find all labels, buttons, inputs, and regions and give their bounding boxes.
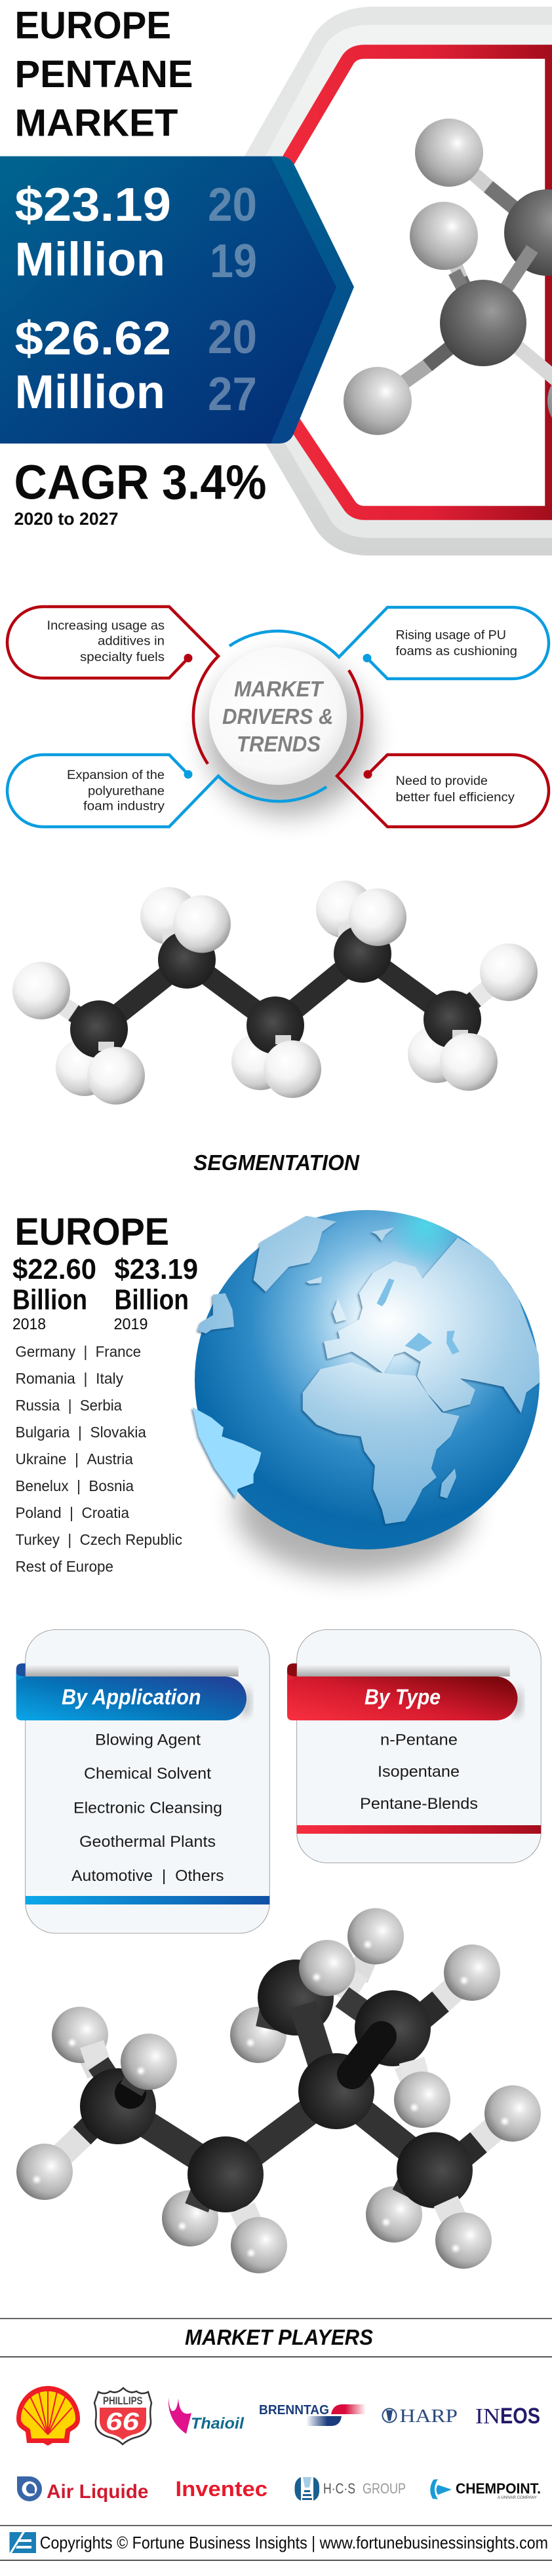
- CAGR: CAGR 3.4%: [14, 455, 266, 510]
- logo: Brenntag: [259, 2403, 366, 2426]
- application list: Automotive | Others: [71, 1867, 224, 1885]
- application list: [71, 1731, 224, 1885]
- callout: increasing usage: [7, 607, 218, 764]
- year 2027: 27: [208, 368, 257, 421]
- regional values: $22.60: [12, 1253, 96, 1285]
- callout: increasing usage: Increasing usage as: [47, 618, 165, 633]
- logo: Inventec: Inventec: [176, 2477, 267, 2501]
- country list: Turkey | Czech Republic: [16, 1531, 182, 1548]
- value: 2019: Million: [14, 233, 165, 286]
- callout: rising PU foams: foams as cushioning: [396, 644, 517, 658]
- accent bar: [26, 1896, 269, 1904]
- callout: polyurethane foam: polyurethane: [88, 784, 165, 798]
- logo: Thaioil: [168, 2398, 245, 2434]
- logo: Harp: HARP: [400, 2406, 458, 2427]
- callout: fuel efficiency: Need to provide: [396, 774, 488, 788]
- title: PENTANE: [14, 53, 193, 96]
- panel: market drivers and trends: [7, 607, 549, 827]
- CAGR: 2020 to 2027: [14, 509, 118, 529]
- panel: by application: [16, 1630, 269, 1933]
- logo: Chempoint: A UNIVAR COMPANY: [498, 2496, 537, 2500]
- molecule: top grey: [344, 119, 552, 435]
- callout: polyurethane foam: [7, 755, 326, 827]
- value: 2019: $23.19: [14, 179, 171, 231]
- callout: polyurethane foam: foam industry: [83, 799, 165, 814]
- logo: Fortune Business Insights: [9, 2532, 36, 2553]
- center heading: DRIVERS &: [222, 704, 333, 729]
- callout: polyurethane foam: Expansion of the: [67, 768, 165, 782]
- center heading: [222, 677, 333, 756]
- logo: Phillips 66: 66: [106, 2408, 140, 2436]
- logo: Phillips 66: [94, 2388, 151, 2444]
- country list: Russia | Serbia: [16, 1397, 123, 1414]
- country list: Rest of Europe: [16, 1558, 113, 1575]
- callout: rising PU foams: Rising usage of PU: [396, 628, 506, 642]
- inland seas: [377, 1279, 460, 1355]
- logo: Phillips 66: PHILLIPS: [103, 2395, 143, 2407]
- country list: Romania | Italy: [16, 1370, 123, 1387]
- logo: INEOS: EOS: [500, 2404, 540, 2429]
- application list: Blowing Agent: [95, 1731, 201, 1749]
- application list: Geothermal Plants: [79, 1833, 216, 1851]
- year 2019: 19: [210, 235, 257, 288]
- year 2027: 20: [208, 311, 257, 364]
- title: [14, 4, 193, 144]
- center circle: [209, 647, 347, 785]
- ribbon: by application: [16, 1663, 250, 1720]
- hero panel: hexagon frame with molecule: [245, 7, 552, 556]
- heading: market players: MARKET PLAYERS: [185, 2325, 373, 2349]
- callout: fuel efficiency: [337, 670, 549, 827]
- logo: Chempoint: CHEMPOINT.: [456, 2480, 541, 2497]
- logo: Air Liquide: [17, 2476, 148, 2503]
- ribbon: by application: By Application: [62, 1685, 201, 1709]
- country list: Benelux | Bosnia: [16, 1477, 134, 1494]
- regional values: 2019: [114, 1316, 148, 1333]
- value: 2027: $26.62: [14, 313, 171, 365]
- regional values: 2018: [12, 1316, 46, 1333]
- type list: Isopentane: [378, 1763, 460, 1781]
- logo: Harp: [383, 2406, 458, 2427]
- logo: HCS Group: [294, 2477, 406, 2501]
- center heading: MARKET: [234, 677, 325, 701]
- logo: HCS Group: GROUP: [363, 2480, 406, 2497]
- country list: Ukraine | Austria: [16, 1450, 134, 1468]
- logo: Air Liquide: Air Liquide: [47, 2481, 148, 2503]
- logo: INEOS: IN: [475, 2404, 500, 2429]
- value: 2027: [14, 313, 171, 419]
- regional values: [12, 1253, 198, 1333]
- callout: fuel efficiency: better fuel efficiency: [396, 790, 515, 805]
- heading: Europe: EUROPE: [14, 1211, 169, 1253]
- logo: INEOS: [475, 2404, 540, 2429]
- country list: Poland | Croatia: [16, 1504, 130, 1521]
- center heading: TRENDS: [237, 732, 321, 756]
- callout: rising PU foams: [229, 607, 549, 679]
- logo: Shell: [16, 2386, 80, 2446]
- logo: Chempoint: [430, 2479, 541, 2500]
- value: 2027: Million: [14, 366, 165, 419]
- continents: [193, 1216, 540, 1524]
- footer: [0, 2526, 552, 2560]
- type list: Pentane-Blends: [360, 1795, 478, 1813]
- molecule: pentane chain: [12, 881, 538, 1105]
- logo: HCS Group: H·C·S: [323, 2480, 355, 2497]
- application list: Chemical Solvent: [84, 1765, 211, 1783]
- logo: Thaioil: Thaioil: [191, 2415, 245, 2433]
- panel: by type: [287, 1630, 541, 1863]
- accent bar: [297, 1825, 541, 1834]
- year 2019: [208, 179, 257, 288]
- callout: increasing usage: specialty fuels: [80, 650, 165, 664]
- callout: increasing usage: additives in: [98, 634, 165, 649]
- country list: [16, 1343, 182, 1575]
- logo: Brenntag: BRENNTAG: [259, 2403, 329, 2417]
- regional values: Billion: [12, 1284, 87, 1316]
- year 2027: [208, 311, 257, 421]
- heading: segmentation: SEGMENTATION: [193, 1150, 360, 1175]
- center circle shadow: [207, 658, 370, 816]
- type list: n-Pentane: [380, 1731, 458, 1749]
- country list: Germany | France: [16, 1343, 141, 1360]
- year 2019: 20: [208, 179, 257, 231]
- title: MARKET: [14, 102, 178, 144]
- globe: [193, 1187, 540, 1576]
- ribbon: by type: By Type: [365, 1685, 441, 1709]
- banner: market size: [0, 156, 354, 444]
- molecule: isopentane: [16, 1908, 541, 2273]
- regional values: Billion: [114, 1284, 189, 1316]
- value: 2019: [14, 179, 171, 286]
- application list: Electronic Cleansing: [73, 1799, 222, 1817]
- country list: Bulgaria | Slovakia: [16, 1424, 147, 1441]
- title: EUROPE: [14, 4, 171, 47]
- regional values: $23.19: [114, 1253, 198, 1285]
- type list: [360, 1731, 478, 1813]
- ribbon: by type: [287, 1663, 522, 1720]
